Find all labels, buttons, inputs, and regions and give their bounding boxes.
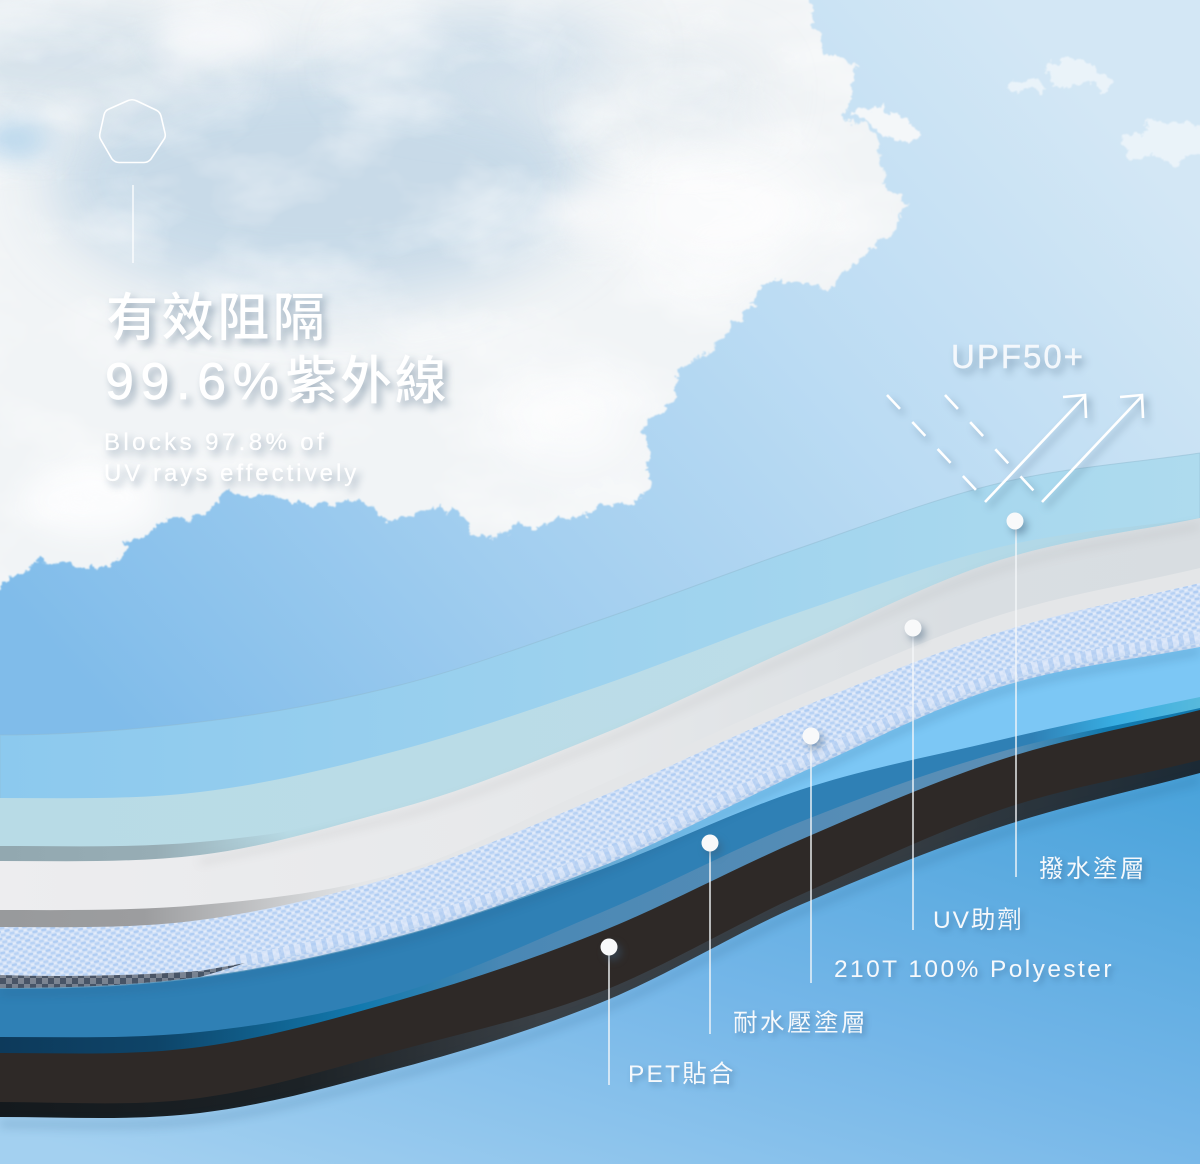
layer: water repellent coating [0, 453, 1200, 1164]
layer: water repellent coating edge [0, 518, 1200, 1164]
callout: water repellent [1006, 512, 1024, 877]
title line 2: 99.6%紫外線 [105, 353, 449, 411]
reflected arrow 1 [985, 395, 1086, 502]
connector line [132, 185, 134, 263]
layer: UV additive [0, 518, 1200, 1164]
subtitle [104, 429, 359, 487]
UV rays diagram [887, 395, 1143, 502]
layer: UV additive edge [0, 568, 1200, 1164]
shadow under fabric [0, 651, 1200, 992]
cloud: mottled texture [0, 6, 678, 518]
callout leaders [600, 512, 1024, 1085]
cloud: wisp near main [853, 103, 918, 144]
title line 1: 有效阻隔 [106, 290, 328, 348]
label: polyester: 210T 100% Polyester [834, 956, 1114, 983]
shadow on UV additive [200, 526, 1200, 862]
subtitle: UV rays effectively [104, 460, 359, 487]
UPF50+ label: UPF50+ [951, 338, 1085, 375]
callout: pressure coating [702, 834, 718, 1034]
layer: PET lamination [0, 710, 1200, 1164]
clouds [0, 0, 1200, 640]
callout: UV additive [904, 620, 922, 930]
label: water repellent coating: 撥水塗層 [1039, 855, 1147, 883]
callout: PET [600, 938, 618, 1085]
layer: pressure-resistant coating edge [0, 708, 1200, 1164]
layer: pressure-resistant coating light [0, 647, 1200, 1164]
layer: polyester fabric [0, 583, 1200, 1164]
title [105, 290, 449, 411]
callout: polyester [802, 728, 820, 983]
incoming UV dashed rays [887, 395, 1034, 491]
layer: polyester fabric edge ridges [230, 637, 1200, 963]
shadow under PET layer [0, 780, 1200, 1125]
label: UV additive: UV助劑 [933, 906, 1024, 934]
layer: polyester fabric dark weave [0, 963, 245, 988]
lower background [0, 773, 1200, 1164]
subtitle: Blocks 97.8% of [104, 429, 327, 456]
cloud: small top right [1005, 51, 1200, 162]
heptagon icon [100, 100, 165, 162]
layer: PET lamination edge [0, 760, 1200, 1164]
label: pressure-resistant coating: 耐水壓塗層 [733, 1009, 868, 1037]
cloud: main [0, 0, 910, 591]
reflected arrow 2 [1042, 395, 1143, 502]
layer: pressure-resistant coating dark [0, 697, 1200, 1164]
label: PET lamination: PET貼合 [628, 1060, 736, 1088]
layer: water repellent coating front [0, 518, 1200, 1164]
fabric layers [0, 453, 1200, 1164]
